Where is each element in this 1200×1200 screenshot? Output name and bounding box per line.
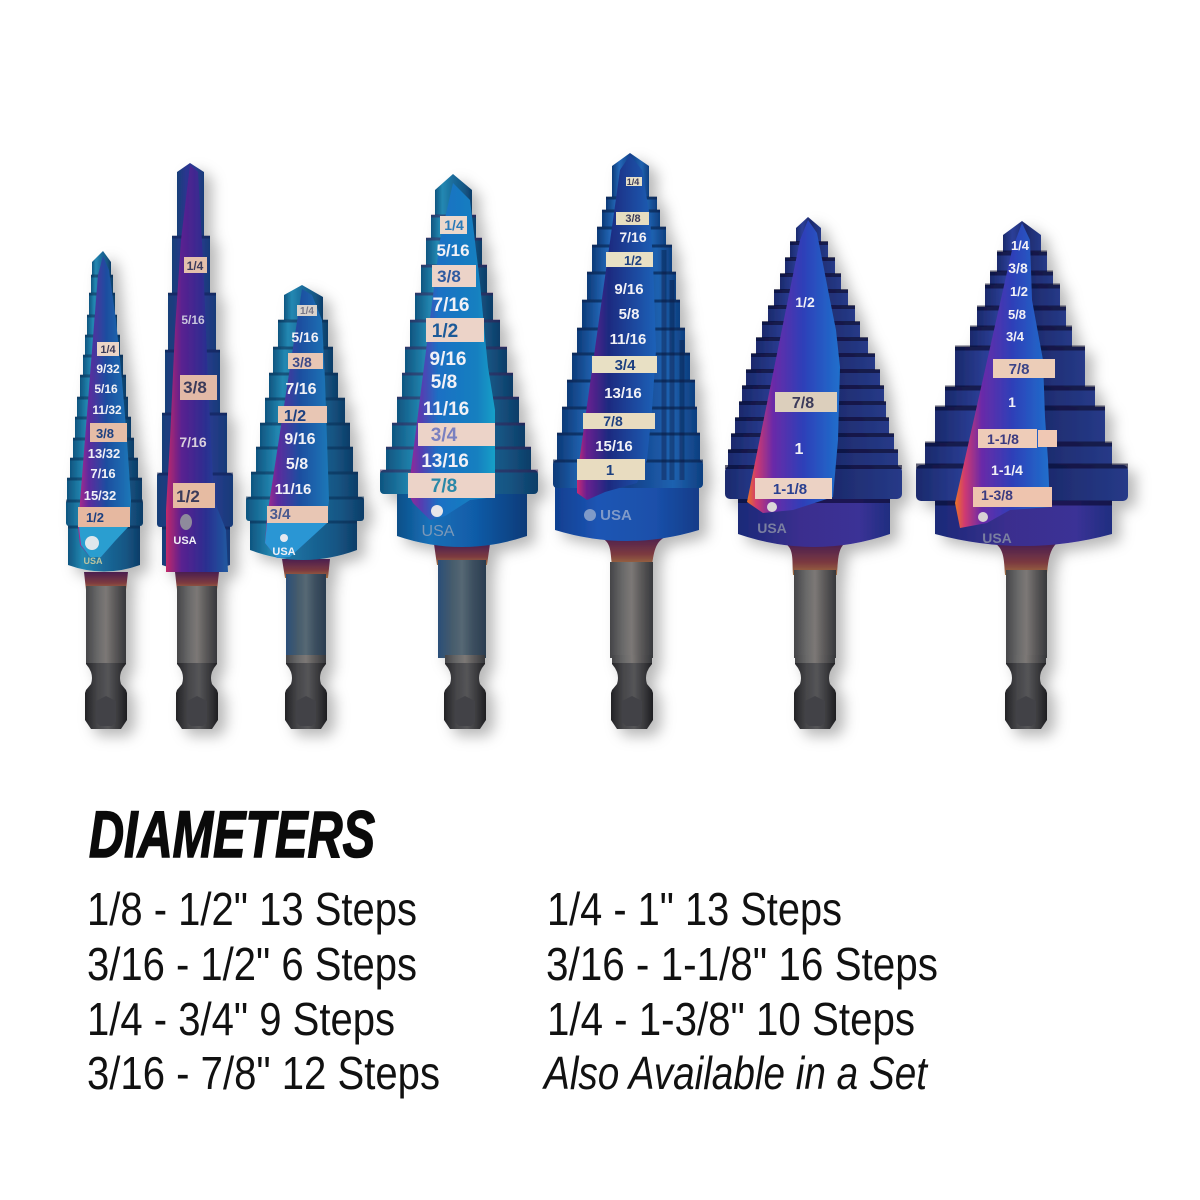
size labels: 1-1/8 [987,431,1019,447]
stepped body [66,251,143,527]
collar [68,522,140,572]
size labels: 5/16 [291,329,319,345]
size labels [408,216,495,540]
size labels: 1 [1008,394,1016,410]
collar [162,522,230,572]
size labels: 1/2 [432,321,458,342]
size labels: 5/8 [619,306,639,323]
size labels [267,305,328,558]
drill bit 5: 1/4 - 1 inch [553,153,703,729]
heading: DIAMETERS [89,797,375,871]
flute [78,256,131,557]
size labels: 7/8 [1009,361,1029,378]
size labels: 7/16 [285,381,317,398]
hex shank [84,572,128,729]
size labels: 15/32 [84,488,116,503]
size labels: 13/16 [421,451,469,472]
flute [747,220,840,513]
flute tail highlight [79,525,130,557]
logo [85,536,99,550]
size labels: 11/32 [92,403,122,417]
size labels: 3/8 [96,426,114,441]
diameters list: left column: 1/4 - 3/4" 9 Steps [87,993,395,1045]
size labels: 1/4 [300,306,314,317]
flute [408,183,495,520]
logo [431,505,443,517]
drill bit 1: 1/8 - 1/2 inch [66,251,143,729]
collar [250,518,357,560]
size labels: 7/16 [179,434,207,450]
collar [555,484,699,541]
size labels [577,177,657,524]
diameters list: right column: Also Available in a Set [541,1047,929,1099]
size labels: 1/4 [1011,238,1030,253]
flute [577,155,656,500]
size labels [755,294,837,536]
size labels: 7/16 [619,229,647,245]
size labels: 1-1/8 [773,481,807,498]
diameters list: right column: 3/16 - 1-1/8" 16 Steps [546,938,938,990]
size labels: 3/8 [183,378,207,397]
size labels: 11/16 [423,399,469,420]
size labels: 3/8 [437,267,461,286]
size labels: 1/4 [627,177,639,187]
size labels: 5/8 [286,456,308,473]
flute [955,223,1050,528]
size labels: 1 [795,441,804,458]
flute [265,289,329,558]
size labels: 9/16 [614,281,644,298]
size labels: 3/4 [431,425,458,446]
size labels: 15/16 [595,438,633,455]
size labels: 5/8 [1008,307,1026,322]
size labels: 7/8 [603,413,623,429]
hex shank [434,544,490,729]
stepped body [246,285,364,522]
size labels: 9/16 [430,349,466,370]
diameters list: left column: 3/16 - 1/2" 6 Steps [87,938,417,990]
size labels: 5/8 [431,372,457,393]
size labels: 1/2 [624,253,642,268]
size labels: USA [83,556,103,566]
logo [584,509,596,521]
diameters list: right column: 1/4 - 1-3/8" 10 Steps [547,993,915,1045]
size labels: 3/4 [270,506,291,523]
stepped body [553,153,703,488]
size labels: 5/16 [181,313,205,327]
stepped body [916,221,1128,503]
logo [280,534,288,542]
size labels: 1/4 [187,259,204,273]
flute tail highlight [265,523,327,558]
drill bit 4: 3/16 - 7/8 inch [380,174,538,729]
size labels: 9/32 [96,362,120,376]
hex shank [282,559,330,729]
stepped body [380,174,538,494]
size labels: 5/16 [436,241,470,260]
size labels: USA [757,520,787,536]
size labels: 13/16 [604,385,642,402]
size labels [173,257,217,547]
logo [180,514,192,530]
diameters list: right column: 1/4 - 1" 13 Steps [547,883,842,935]
hex shank [996,544,1056,729]
hex shank [786,544,844,729]
size labels: 1/2 [176,487,200,506]
stepped body [157,163,233,528]
size labels: 7/8 [431,476,457,497]
size labels: 1/2 [284,408,306,425]
drill bit 7: 1/4 - 1-3/8 inch [916,221,1128,729]
collar [738,496,890,547]
size labels: 9/16 [284,431,316,448]
size labels: 11/16 [610,331,646,348]
size labels: 1-1/4 [991,462,1023,478]
diameters list: left column [87,883,440,1099]
size labels: 1/4 [100,344,117,356]
logo [767,502,777,512]
size labels: USA [272,546,296,558]
size labels: 1-3/8 [981,487,1013,503]
size labels: USA [173,535,197,547]
size labels: 7/16 [433,295,469,316]
logo [978,512,988,522]
diameters list: right column [541,883,938,1099]
size labels: 7/8 [792,395,814,412]
size labels: 1/2 [86,510,104,525]
size labels: USA [422,523,455,540]
size labels: 11/16 [275,481,311,498]
size labels: 3/8 [292,354,312,370]
size labels: 1 [606,462,614,479]
collar [397,490,527,547]
size labels: 3/4 [1006,329,1025,344]
size labels: 3/8 [625,213,641,225]
stepped body [725,217,902,501]
size labels: 1/2 [1010,284,1028,299]
collar [935,496,1112,546]
size labels: 1/4 [444,217,464,233]
size labels: 13/32 [88,446,120,461]
hex shank [596,536,668,729]
hex shank [175,572,219,729]
size labels: 3/4 [615,357,636,374]
size labels: 5/16 [94,382,118,396]
size labels [973,238,1057,546]
drill bit 6: 3/16 - 1-1/8 inch [725,217,902,729]
size labels: 3/8 [1008,260,1028,276]
diameters list: left column: 3/16 - 7/8" 12 Steps [87,1047,440,1099]
drill bit 2: 3/16 - 1/2 inch [157,163,233,729]
size labels: USA [600,507,632,524]
size labels: USA [982,530,1012,546]
diameters list: left column: 1/8 - 1/2" 13 Steps [87,883,417,935]
size labels: 1/2 [795,294,815,310]
size labels [78,342,130,566]
flute [166,165,228,572]
drill bit 3: 1/4 - 3/4 inch [246,285,364,729]
size labels: 7/16 [90,466,116,481]
